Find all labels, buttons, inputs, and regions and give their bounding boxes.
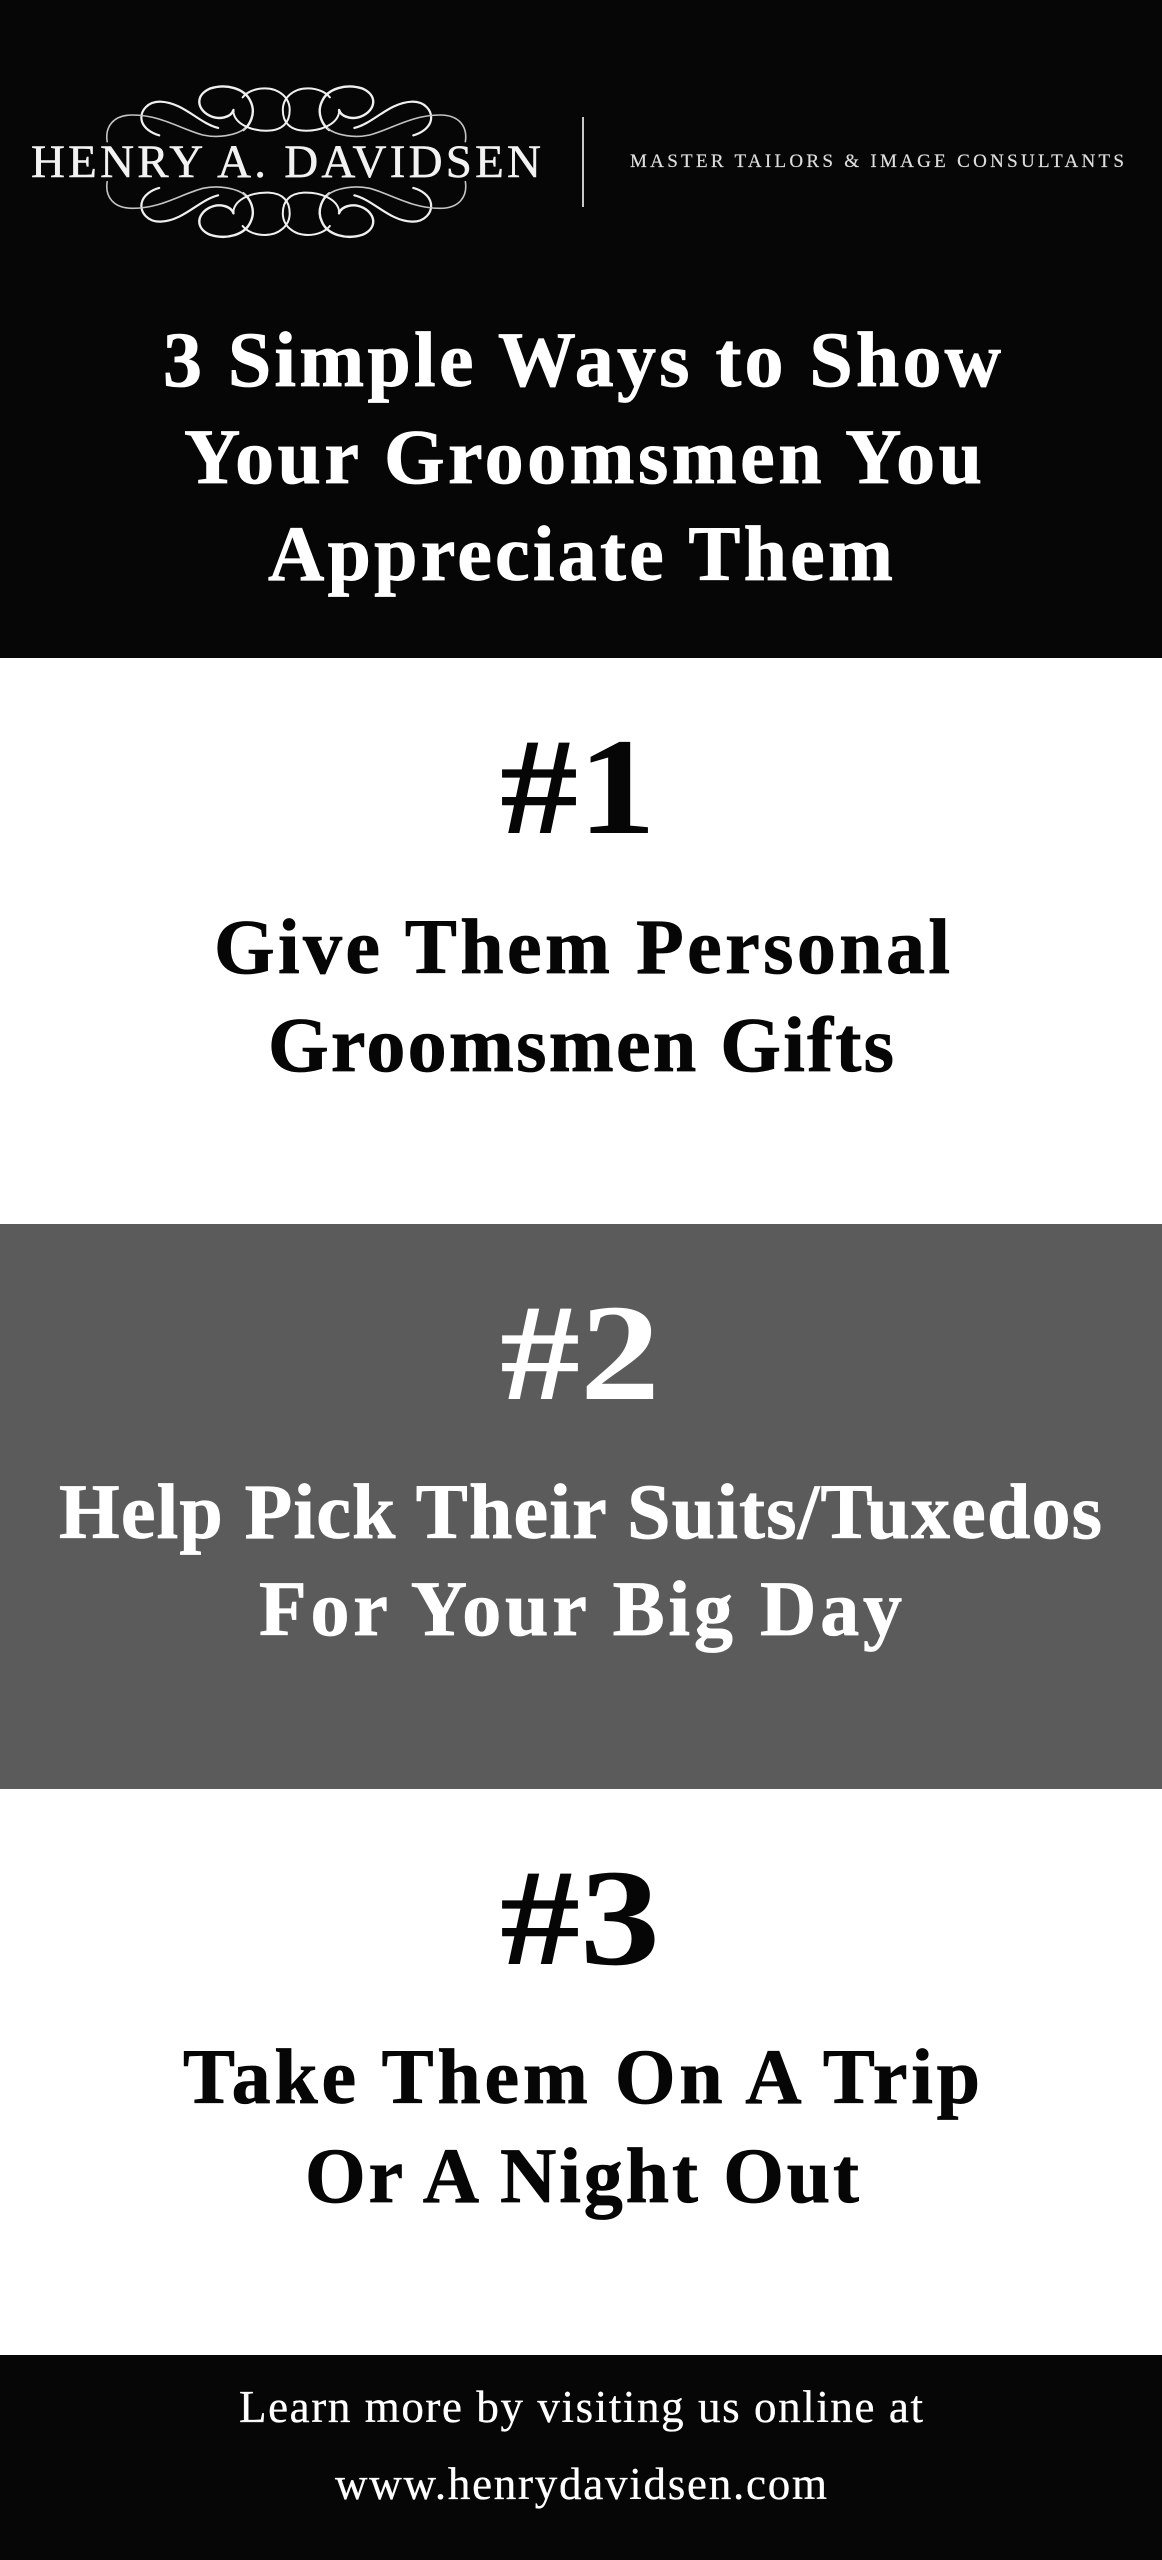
panel: header xyxy=(0,0,1162,658)
title: 3 Simple Ways to Show xyxy=(163,316,1001,403)
title: Your Groomsmen You xyxy=(184,413,982,500)
panel: tip 3 xyxy=(0,1789,1162,2355)
heading: tip 2: Help Pick Their Suits/Tuxedos xyxy=(59,1468,1102,1555)
footer call to action: Learn more by visiting us online at xyxy=(239,2382,923,2432)
number 1: #1 xyxy=(500,710,656,863)
title xyxy=(163,316,1001,597)
number 3: #3 xyxy=(500,1841,660,1994)
title: Appreciate Them xyxy=(268,510,893,597)
tagline: MASTER TAILORS & IMAGE CONSULTANTS xyxy=(630,151,1124,172)
footer call to action xyxy=(239,2382,923,2509)
panel: tip 2 xyxy=(0,1224,1162,1789)
heading: tip 2 xyxy=(59,1468,1102,1652)
heading: tip 1 xyxy=(214,903,950,1088)
number 2: #2 xyxy=(500,1276,660,1429)
logo wordmark: HENRY A. DAVIDSEN xyxy=(31,136,541,188)
logo: Henry A. Davidsen xyxy=(31,87,541,237)
footer call to action: www.henrydavidsen.com xyxy=(335,2459,827,2509)
heading: tip 1: Give Them Personal xyxy=(214,903,950,990)
panel: tip 1 xyxy=(0,658,1162,1224)
heading: tip 1: Groomsmen Gifts xyxy=(268,1001,894,1088)
heading: tip 3: Take Them On A Trip xyxy=(183,2033,980,2120)
heading: tip 3 xyxy=(183,2033,980,2219)
logo divider xyxy=(582,117,584,207)
heading: tip 3: Or A Night Out xyxy=(305,2132,859,2219)
panel: footer xyxy=(0,2355,1162,2560)
heading: tip 2: For Your Big Day xyxy=(259,1565,902,1652)
logo flourish ornament xyxy=(107,87,466,237)
